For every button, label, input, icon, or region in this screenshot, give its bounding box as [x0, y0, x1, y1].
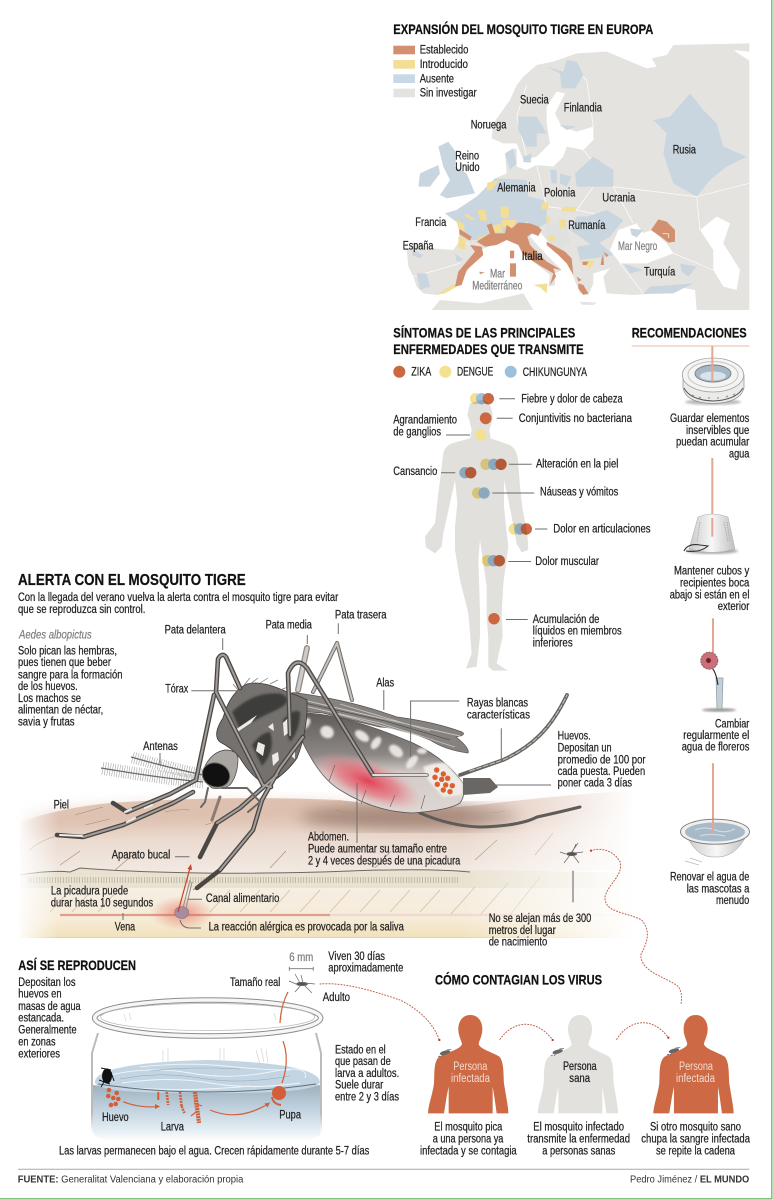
anatomy labels and leaders: Huevos. [558, 730, 591, 742]
head and eye [205, 750, 238, 789]
icon: flower vase [701, 652, 736, 712]
icon: water bowl [680, 819, 750, 865]
anatomy labels and leaders: Piel [54, 799, 69, 811]
symptom labels and leaders: Conjuntivitis no bacteriana [519, 413, 633, 425]
anatomy labels and leaders: Pata trasera [335, 609, 387, 621]
white stripes [297, 716, 427, 771]
map labels: Suecia [520, 94, 549, 106]
recommendation text 1: puedan acumular [676, 437, 749, 449]
anatomy labels and leaders: Pata delantera [165, 624, 226, 636]
map labels: Rusia [673, 144, 696, 156]
icon: mosquito on shoulder [551, 1048, 564, 1056]
figure label [676, 1061, 715, 1085]
anatomy labels and leaders: La reacción alérgica es provocada por la saliva [209, 921, 404, 933]
stage labels: Las larvas permanecen bajo el agua. Crecen rápidamente durante 5-7 días [59, 1145, 369, 1157]
text: reproduction note: masas de agua [18, 1001, 81, 1013]
text: flight range note: No se alejan más de 300 [489, 913, 591, 925]
map labels: Polonia [544, 188, 576, 200]
caption 3: Si otro mosquito sano [650, 1122, 741, 1134]
map labels: Mar Negro [618, 241, 657, 253]
recommendation text 4: las mascotas a [687, 883, 750, 895]
figure label: infectada [676, 1073, 715, 1085]
caption 2: El mosquito infectado [533, 1122, 624, 1134]
text: reproduction note: en zonas [18, 1036, 56, 1048]
anatomy labels and leaders: Tórax [165, 684, 188, 696]
map labels: Alemania [497, 183, 536, 195]
recommendation text 4: Renovar el agua de [670, 872, 749, 884]
map legend: Establecido [420, 45, 468, 57]
mosquito drawing [57, 643, 580, 888]
antennae [101, 757, 203, 782]
symptom labels and leaders: inferiores [533, 637, 573, 649]
panel: symptoms [393, 325, 651, 671]
icon: mosquito on shoulder [667, 1047, 680, 1055]
heading: alert: Con la llegada del verano vuelva la alerta contra el mosquito tigre para evitar [18, 592, 338, 604]
text: reproduction note: Depositan los [18, 977, 76, 989]
map labels: Italia [522, 251, 543, 263]
text: reproduction note [18, 977, 81, 1060]
map labels: Mediterráneo [472, 280, 522, 292]
recommendation text 2 [670, 566, 750, 613]
map labels: España [403, 240, 434, 252]
recommendation text 2: recipientes boca [680, 577, 750, 589]
abdomen tip [463, 778, 498, 795]
anatomy labels and leaders: Abdomen. [308, 832, 349, 844]
stage labels: Suele durar [335, 1080, 383, 1092]
text: flight range note: metros del lugar [489, 925, 556, 937]
recommendation text 3: agua de floreros [682, 742, 750, 754]
symptom labels and leaders: Agrandamiento [393, 414, 457, 426]
map title: EXPANSIÓN DEL MOSQUITO TIGRE EN EUROPA [393, 20, 653, 37]
symptom labels and leaders: Cansancio [393, 466, 437, 478]
figure label: Persona [563, 1061, 597, 1073]
panel: Europe map [393, 20, 749, 310]
text: reproduction note: Generalmente [18, 1024, 77, 1036]
anatomy labels and leaders: Alas [376, 678, 394, 690]
disease legend: DENGUE [457, 366, 494, 378]
heading: alert [18, 572, 338, 616]
text: flight range note: de nacimiento [489, 937, 547, 949]
map legend: Introducido [420, 59, 468, 71]
stage labels: aproximadamente [328, 963, 403, 975]
symptom labels and leaders: Alteración en la piel [536, 459, 618, 471]
size indicator: Tamaño real [230, 977, 280, 989]
anatomy labels and leaders: características [467, 709, 530, 721]
caption 2: transmite la enfermedad [527, 1134, 630, 1146]
life cycle [106, 992, 288, 1123]
stage labels [59, 951, 403, 1157]
symptom labels and leaders: Dolor en articulaciones [553, 523, 651, 535]
caption 3: chupa la sangre infectada [641, 1134, 750, 1146]
text: species note: Los machos se [18, 693, 81, 705]
text: species note: savia y frutas [18, 717, 75, 729]
icon: tire [682, 358, 744, 405]
anatomy labels and leaders: Puede aumentar su tamaño entre [308, 844, 447, 856]
text: species note: pues tienen que beber [18, 657, 111, 669]
symptom labels and leaders: Dolor muscular [535, 556, 599, 568]
anatomy labels and leaders: Rayas blancas [467, 698, 528, 710]
symptoms heading: ENFERMEDADES QUE TRANSMITE [393, 341, 584, 357]
dotted flight paths [320, 849, 682, 1041]
anatomy labels and leaders: Canal alimentario [206, 893, 279, 905]
author credit: Pedro Jiménez / EL MUNDO [630, 1175, 749, 1186]
text: species note [18, 629, 122, 729]
abdomen [300, 713, 464, 813]
text: reproduction note: huevos en [18, 989, 62, 1001]
text: species note: alimentan de néctar, [18, 705, 103, 717]
heading: alert: que se reproduzca sin control. [18, 604, 145, 616]
map labels: Mar [490, 269, 505, 281]
symptom labels and leaders: líquidos en miembros [533, 626, 622, 638]
stage labels: Viven 30 días [328, 951, 385, 963]
symptom labels and leaders: Náuseas y vómitos [540, 486, 618, 498]
panel: recommendations [632, 325, 750, 907]
recommendations heading: RECOMENDACIONES [632, 325, 747, 341]
symptom labels and leaders [393, 393, 651, 649]
recommendation text 1: agua [729, 449, 750, 461]
source credit: FUENTE: Generalitat Valenciana y elaboración propia [18, 1174, 244, 1185]
recommendation text 3: Cambiar [715, 718, 749, 730]
icon: bucket [684, 514, 738, 554]
symptom labels and leaders: Acumulación de [533, 614, 599, 626]
jar with water [92, 992, 321, 1141]
stage labels: Huevo [102, 1112, 129, 1124]
map labels: Ucrania [602, 193, 636, 205]
figure label: Persona [679, 1061, 713, 1073]
anatomy labels and leaders: Antenas [143, 741, 178, 753]
icon: small flying mosquito [560, 843, 583, 863]
text: species note: Aedes albopictus [18, 629, 92, 641]
recommendation text 2: abajo si están en el [670, 589, 749, 601]
figure label: Persona [453, 1061, 488, 1073]
figure: infected person [428, 1015, 508, 1113]
caption 1: El mosquito pica [434, 1122, 503, 1134]
anatomy labels and leaders: cada puesta. Pueden [558, 766, 645, 778]
wing [280, 693, 468, 753]
map labels: Turquía [644, 267, 676, 279]
anatomy labels and leaders: Depositan un [558, 743, 612, 755]
caption 3: se repite la cadena [656, 1145, 735, 1157]
recommendation text 1 [670, 413, 750, 461]
caption 2: a personas sanas [542, 1145, 615, 1157]
stage labels: Adulto [323, 992, 350, 1004]
disease legend: ZIKA [411, 366, 432, 378]
puncture site [150, 864, 217, 930]
icon: adult mosquito [289, 974, 315, 993]
size indicator: 6 mm [289, 952, 313, 964]
map: territory shapes [407, 43, 749, 310]
map legend: Sin investigar [420, 88, 477, 100]
caption 1: a una persona ya [433, 1134, 504, 1146]
stage labels: larva a adultos. [335, 1068, 399, 1080]
anatomy labels and leaders: durar hasta 10 segundos [51, 898, 153, 910]
anatomy labels and leaders: La picadura puede [51, 886, 128, 898]
text: species note: sangre para la formación [18, 669, 122, 681]
panel: how viruses spread [420, 970, 750, 1157]
heading: alert: ALERTA CON EL MOSQUITO TIGRE [18, 572, 246, 589]
symptom labels and leaders: Fiebre y dolor de cabeza [521, 393, 623, 405]
text: reproduction note: estancada. [18, 1013, 64, 1025]
text: reproduction note: exteriores [18, 1048, 60, 1060]
recommendation text 4 [670, 872, 750, 907]
rear legs behind body [298, 643, 580, 827]
footer [18, 1169, 749, 1186]
panel: main mosquito illustration [18, 572, 646, 938]
recommendation text 2: Mantener cubos y [674, 566, 749, 578]
map legend: Ausente [420, 74, 454, 86]
legs [57, 655, 427, 888]
icon: mosquito on shoulder [438, 1049, 451, 1057]
anatomy labels and leaders: Pata media [266, 619, 312, 631]
symptom labels and leaders: de ganglios [393, 426, 441, 438]
figure: second infected person [653, 1015, 734, 1113]
text: species note: Solo pican las hembras, [18, 645, 117, 657]
panel: reproduction [18, 951, 403, 1157]
map labels: Francia [415, 217, 447, 229]
figure label: infectada [451, 1073, 490, 1085]
map labels [403, 94, 696, 292]
text: species note: de los huevos. [18, 681, 78, 693]
recommendation text 1: Guardar elementos [670, 413, 749, 425]
caption 3 [641, 1122, 750, 1157]
map labels: Noruega [471, 120, 507, 132]
caption 1: infectada y se contagia [420, 1145, 517, 1157]
text: flight range note [489, 871, 591, 949]
anatomy labels and leaders: Vena [115, 921, 136, 933]
eggs [432, 767, 455, 794]
stage labels: que pasan de [335, 1056, 391, 1068]
recommendation text 4: menudo [716, 895, 749, 907]
caption 1 [420, 1122, 517, 1157]
map labels: Unido [455, 162, 480, 174]
map legend [393, 45, 477, 100]
map labels: Finlandia [564, 102, 602, 114]
symptom markers [459, 393, 532, 624]
figure label: sana [569, 1073, 591, 1085]
figure label [451, 1061, 490, 1085]
recommendation text 1: inservibles que [686, 425, 749, 437]
recommendation text 3: regularmente el [683, 730, 749, 742]
recommendation text 3 [682, 718, 750, 754]
figure label [563, 1061, 597, 1085]
stage labels: Pupa [279, 1109, 301, 1121]
skin cross-section [20, 790, 640, 938]
leader lines [632, 346, 749, 833]
symptoms heading: SÍNTOMAS DE LAS PRINCIPALES [393, 325, 575, 341]
stage labels: Estado en el [335, 1044, 386, 1056]
human body silhouette [425, 400, 528, 671]
stage labels: Larva [161, 1121, 184, 1133]
symptoms heading [393, 325, 584, 357]
icon: black mosquito on jar [99, 1068, 114, 1087]
anatomy labels and leaders: promedio de 100 por [558, 754, 646, 766]
disease legend: CHIKUNGUNYA [523, 367, 587, 379]
size indicator [230, 952, 313, 989]
anatomy labels and leaders [51, 609, 646, 933]
figure: healthy person silhouette [538, 1015, 618, 1113]
reproduction heading: ASÍ SE REPRODUCEN [18, 957, 136, 973]
disease legend [393, 366, 587, 379]
recommendation text 2: exterior [718, 601, 750, 613]
anatomy labels and leaders: 2 y 4 veces después de una picadura [308, 856, 461, 868]
thorax [217, 683, 307, 785]
contagion heading: CÓMO CONTAGIAN LOS VIRUS [435, 970, 602, 987]
anatomy labels and leaders: poner cada 3 días [558, 778, 632, 790]
map labels: Rumanía [568, 220, 606, 232]
map labels: Reino [455, 150, 479, 162]
anatomy labels and leaders: Aparato bucal [112, 849, 170, 861]
caption 2 [527, 1122, 630, 1157]
stage labels: entre 2 y 3 días [335, 1092, 399, 1104]
